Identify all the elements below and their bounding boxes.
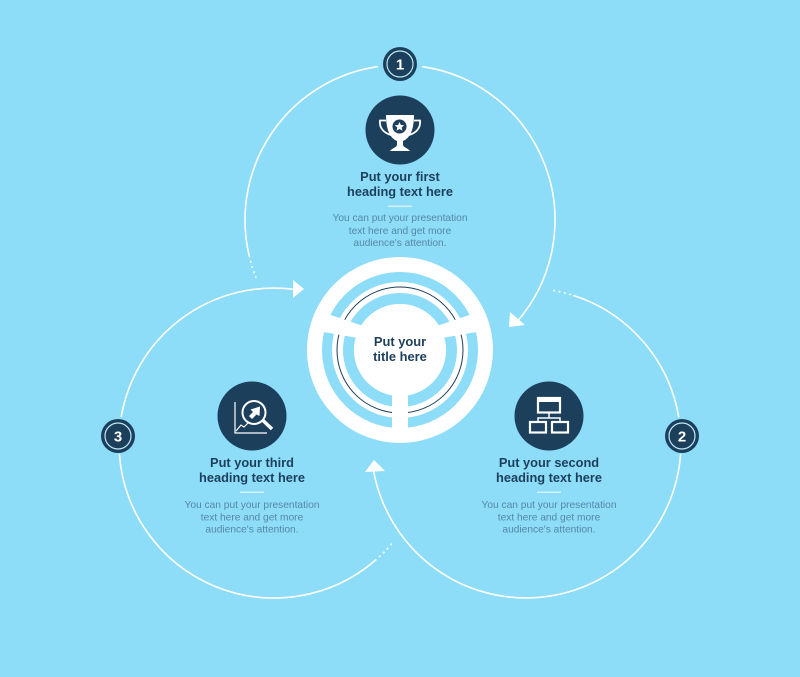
panel: step 3 [101, 382, 320, 536]
center title: Put your [374, 334, 426, 349]
heading: step 1: heading text here [347, 184, 453, 199]
badge: number 2 [665, 419, 699, 453]
arc: step 1 dotted tail [249, 255, 256, 278]
icon: chart magnifier [218, 382, 286, 450]
heading: step 1 [347, 169, 453, 199]
icon: org chart [514, 382, 584, 450]
text block: step 1 [332, 213, 468, 249]
text block: step 3 [184, 500, 320, 536]
arc: step 1 right side [422, 67, 555, 320]
center wheel [307, 257, 493, 443]
badge: number 3 [101, 419, 135, 453]
panel: step 2 [482, 382, 699, 536]
badge: number 3: 3 [114, 428, 122, 446]
arrowhead: into center from step 1 [509, 312, 525, 327]
text block: step 1: text here and get more [349, 226, 452, 237]
heading: step 3 [199, 455, 305, 485]
heading: step 3: heading text here [199, 470, 305, 485]
text block: step 3: text here and get more [201, 512, 304, 524]
arrowhead: into center from step 3 [293, 280, 304, 298]
cycle arcs and arrows [119, 67, 681, 598]
heading: step 2: Put your second [499, 455, 599, 470]
arc: step 2 upper [573, 295, 679, 417]
center title [373, 334, 427, 364]
text block: step 1: audience's attention. [353, 238, 447, 249]
arc: step 3 upper [121, 288, 293, 417]
arc: step 1 left side [245, 67, 378, 255]
badge: number 2: 2 [678, 428, 686, 446]
arc: step 2 lower [374, 454, 681, 598]
badge: number 1 [383, 47, 417, 81]
divider: step 3 [240, 492, 264, 493]
text block: step 2: You can put your presentation [482, 500, 616, 511]
badge: number 1: 1 [396, 56, 404, 74]
icon: trophy [366, 96, 434, 164]
divider: step 2 [537, 492, 561, 493]
divider: step 1 [388, 206, 412, 207]
text block: step 3: You can put your presentation [184, 500, 320, 511]
text block: step 2: text here and get more [498, 512, 601, 524]
arc: step 3 lower [119, 454, 375, 598]
text block: step 2: audience's attention. [502, 524, 596, 536]
arc: step 2 dotted tail [553, 290, 573, 295]
arrowhead: into center from step 2 [365, 460, 385, 472]
heading: step 2: heading text here [496, 470, 602, 485]
text block: step 2 [482, 500, 616, 536]
text block: step 3: audience's attention. [205, 524, 299, 536]
heading: step 3: Put your third [210, 455, 294, 470]
heading: step 1: Put your first [360, 169, 441, 184]
text block: step 1: You can put your presentation [332, 213, 468, 224]
heading: step 2 [496, 455, 602, 485]
arc: step 3 dotted tail [375, 544, 392, 560]
panel: step 1 [332, 47, 468, 249]
center title: title here [373, 349, 427, 364]
